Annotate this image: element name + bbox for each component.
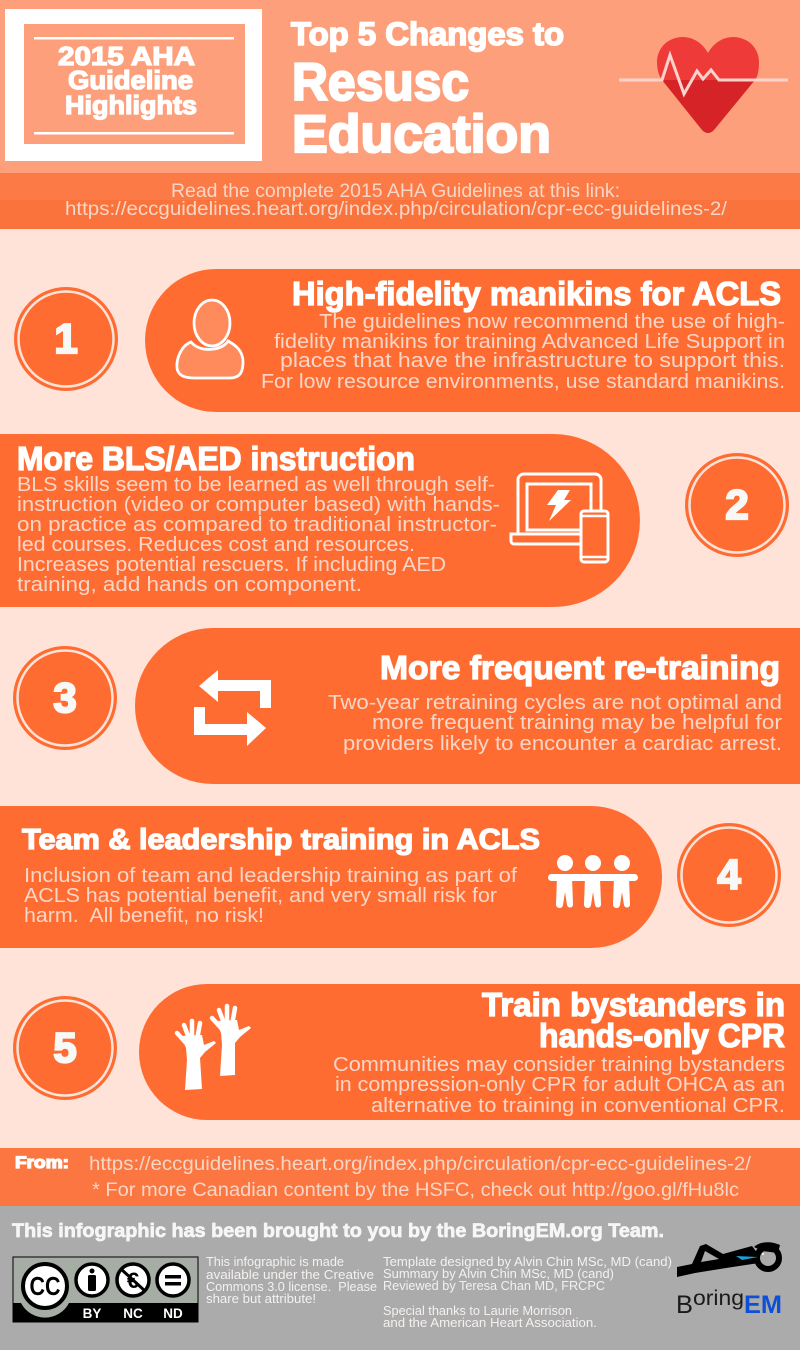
badge: 2015 AHA Guideline Highlights <box>5 9 262 161</box>
footer heading: This infographic has been brought to you by the BoringEM.org Team. <box>12 1221 664 1242</box>
credits text <box>383 1255 672 1330</box>
icon: heart with ECG line <box>619 37 788 133</box>
heading: High-fidelity manikins for ACLS <box>292 275 781 312</box>
body text: training, add hands on component. <box>17 574 362 596</box>
icon: laptop and phone <box>511 474 608 562</box>
body text: The guidelines now recommend the use of high- <box>319 311 785 333</box>
number 4: 4 <box>717 851 741 898</box>
number 4 <box>677 823 781 927</box>
body text: alternative to training in conventional CPR. <box>371 1095 785 1117</box>
title: Resusc <box>292 53 469 112</box>
Creative Commons badge: NC <box>123 1306 143 1321</box>
sources band: https://eccguidelines.heart.org/index.php/circulation/cpr-ecc-guidelines-2/ <box>89 1154 752 1175</box>
title <box>291 16 564 164</box>
body text <box>328 692 782 755</box>
Creative Commons badge: € <box>127 1268 139 1293</box>
header banner <box>0 0 800 173</box>
panel 5: train bystanders in hands-only CPR <box>13 984 800 1120</box>
badge: 2015 AHA Guideline Highlights: Guideline <box>68 65 193 95</box>
body text: For low resource environments, use standard manikins. <box>261 371 785 393</box>
credits text: Summary by Alvin Chin MSc, MD (cand) <box>383 1267 614 1281</box>
panel 3: more frequent re-training <box>13 628 800 784</box>
link band <box>0 173 800 229</box>
body text: led courses. Reduces cost and resources. <box>17 534 415 556</box>
number 3: 3 <box>53 674 77 721</box>
license note <box>206 1255 377 1306</box>
body text <box>17 474 500 596</box>
link band: https://eccguidelines.heart.org/index.php/circulation/cpr-ecc-guidelines-2/ <box>65 199 728 220</box>
number 1 <box>14 287 118 391</box>
body text: Increases potential rescuers. If including AED <box>17 554 446 576</box>
number 2: 2 <box>725 481 749 528</box>
Creative Commons badge: ND <box>163 1306 183 1321</box>
credits text: Reviewed by Teresa Chan MD, FRCPC <box>383 1279 605 1293</box>
body text: harm. All benefit, no risk! <box>24 905 264 927</box>
body text: places that have the infrastructure to support this. <box>280 350 785 372</box>
body text: BLS skills seem to be learned as well through self- <box>17 474 495 496</box>
heading: More frequent re-training <box>380 649 780 686</box>
icon: repeat arrows <box>194 670 271 746</box>
license note: available under the Creative <box>206 1268 374 1282</box>
body text: instruction (video or computer based) with hands- <box>17 494 500 516</box>
icon: raised hands <box>177 1006 251 1090</box>
body text: in compression-only CPR for adult OHCA as an <box>335 1074 785 1096</box>
body text: Two-year retraining cycles are not optimal and <box>328 692 782 714</box>
credits footer <box>0 1206 800 1350</box>
Creative Commons badge <box>13 1257 198 1322</box>
BoringEM logo: oring <box>693 1287 744 1310</box>
heading: More BLS/AED instruction <box>17 440 415 477</box>
panel 1: high-fidelity manikins <box>14 269 800 412</box>
heading: hands-only CPR <box>539 1017 785 1054</box>
number 5 <box>13 996 117 1100</box>
credits text: Template designed by Alvin Chin MSc, MD (cand) <box>383 1255 672 1269</box>
badge: 2015 AHA Guideline Highlights: 2015 AHA <box>58 41 195 71</box>
sources band: From: <box>15 1153 69 1172</box>
panel 2: more BLS/AED instruction <box>0 434 789 607</box>
license note: Commons 3.0 license. Please <box>206 1280 377 1294</box>
Creative Commons badge: BY <box>83 1306 101 1321</box>
body text <box>24 865 517 927</box>
credits text: and the American Heart Association. <box>383 1316 597 1330</box>
panel 4: team and leadership training <box>0 806 781 948</box>
heading: Team & leadership training in ACLS <box>22 824 540 856</box>
credits text: Special thanks to Laurie Morrison <box>383 1304 572 1318</box>
link band: Read the complete 2015 AHA Guidelines at this link: <box>171 181 620 202</box>
body text: Communities may consider training bystanders <box>333 1054 785 1076</box>
icon: person <box>177 300 243 378</box>
body text <box>333 1054 785 1117</box>
Creative Commons badge: CC <box>30 1271 61 1301</box>
BoringEM logo: B <box>676 1291 693 1319</box>
title: Top 5 Changes to <box>291 16 564 52</box>
number 5: 5 <box>53 1024 77 1071</box>
title: Education <box>292 105 551 164</box>
body text: providers likely to encounter a cardiac arrest. <box>343 733 782 755</box>
number 1: 1 <box>54 315 78 362</box>
badge: 2015 AHA Guideline Highlights: Highlights <box>65 90 197 120</box>
number 3 <box>13 646 117 750</box>
BoringEM logo <box>676 1242 782 1319</box>
sources band: * For more Canadian content by the HSFC, check out http://goo.gl/fHu8lc <box>92 1180 739 1201</box>
heading <box>482 986 785 1054</box>
number 2 <box>685 453 789 557</box>
BoringEM logo: EM <box>744 1291 782 1319</box>
license note: share but attribute! <box>206 1292 316 1306</box>
heading: Train bystanders in <box>482 986 785 1023</box>
body text: on practice as compared to traditional instructor- <box>17 514 497 536</box>
license note: This infographic is made <box>206 1255 344 1269</box>
body text: Inclusion of team and leadership training as part of <box>24 865 517 887</box>
body text: ACLS has potential benefit, and very small risk for <box>24 885 497 907</box>
body text: fidelity manikins for training Advanced Life Support in <box>274 331 785 353</box>
icon: three people linked <box>548 855 638 908</box>
body text: more frequent training may be helpful for <box>372 712 782 734</box>
body text <box>261 311 785 393</box>
sources band <box>0 1148 800 1206</box>
